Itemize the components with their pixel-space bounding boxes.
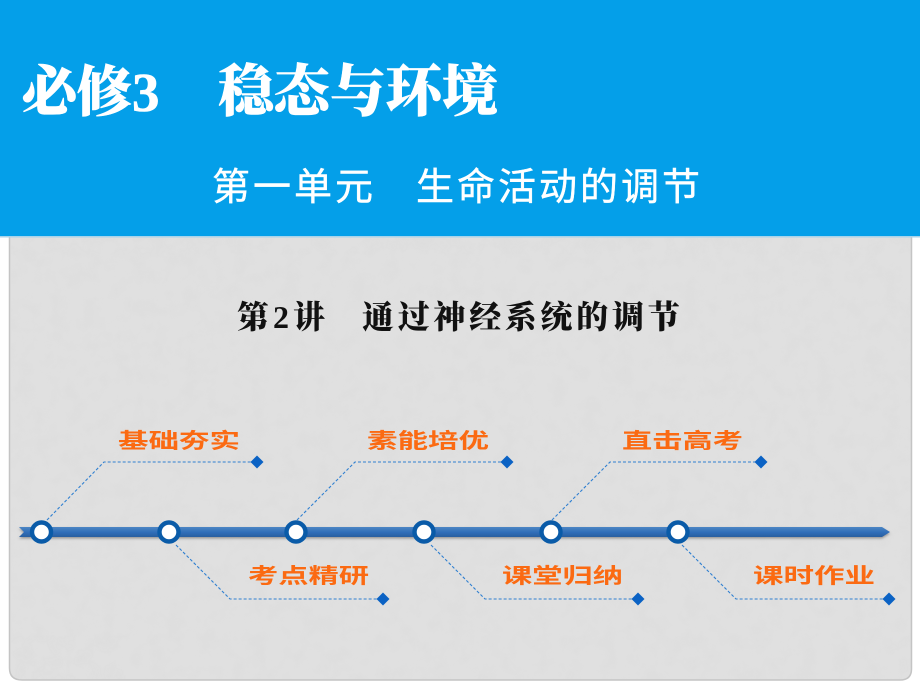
title: module name: 必修3: [22, 62, 160, 123]
title: module topic: 稳态与环境: [218, 62, 498, 124]
header band: [0, 0, 920, 238]
heading: lesson number: 第2讲: [237, 299, 329, 335]
node 2: 考点精研: 考点精研: [248, 565, 369, 588]
node 5: 直击高考: [542, 429, 768, 542]
node 4: 课堂归纳: 课堂归纳: [502, 565, 623, 588]
panel: grey content background: [10, 225, 912, 680]
node 6: 课时作业: [668, 522, 896, 606]
node 2: 考点精研: [160, 522, 390, 606]
node 5: 直击高考: 直击高考: [622, 429, 743, 453]
heading: lesson title: 通过神经系统的调节: [362, 299, 683, 335]
subtitle: unit number: 第一单元: [212, 167, 376, 209]
node 3: 素能培优: 素能培优: [367, 430, 489, 453]
node 4: 课堂归纳: [414, 522, 644, 606]
timeline bar: [19, 527, 890, 537]
subtitle: unit topic: 生命活动的调节: [416, 167, 703, 209]
node 1: 基础夯实: [32, 429, 264, 542]
node 3: 素能培优: [286, 430, 514, 542]
node 1: 基础夯实: 基础夯实: [118, 429, 240, 453]
node 6: 课时作业: 课时作业: [753, 565, 875, 588]
